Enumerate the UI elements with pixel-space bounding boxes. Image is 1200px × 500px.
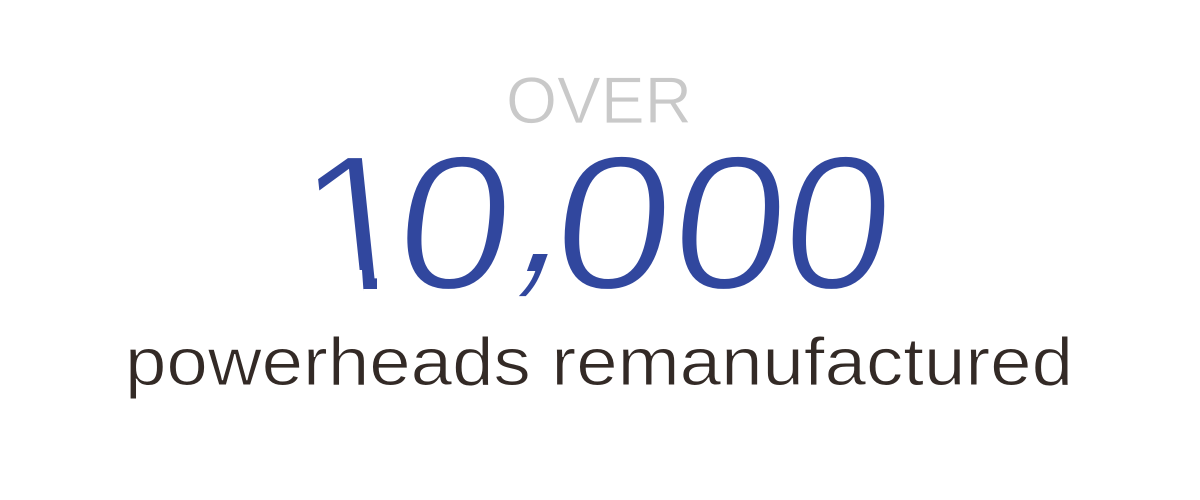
big number: 10,000: ,	[491, 96, 625, 315]
big number: 10,000: 0	[662, 115, 800, 330]
infographic: stat	[130, 77, 1068, 398]
caption: powerheads remanufactured: powerheads remanufactured	[125, 324, 1073, 400]
big number: 10,000	[318, 156, 884, 296]
big number: 10,000: 0	[544, 116, 685, 331]
big number: 10,000: 1	[289, 114, 427, 333]
heading: OVER: OVER	[506, 63, 692, 137]
big number: 10,000: 0	[773, 116, 904, 330]
big number: 10,000: 0	[387, 115, 525, 330]
